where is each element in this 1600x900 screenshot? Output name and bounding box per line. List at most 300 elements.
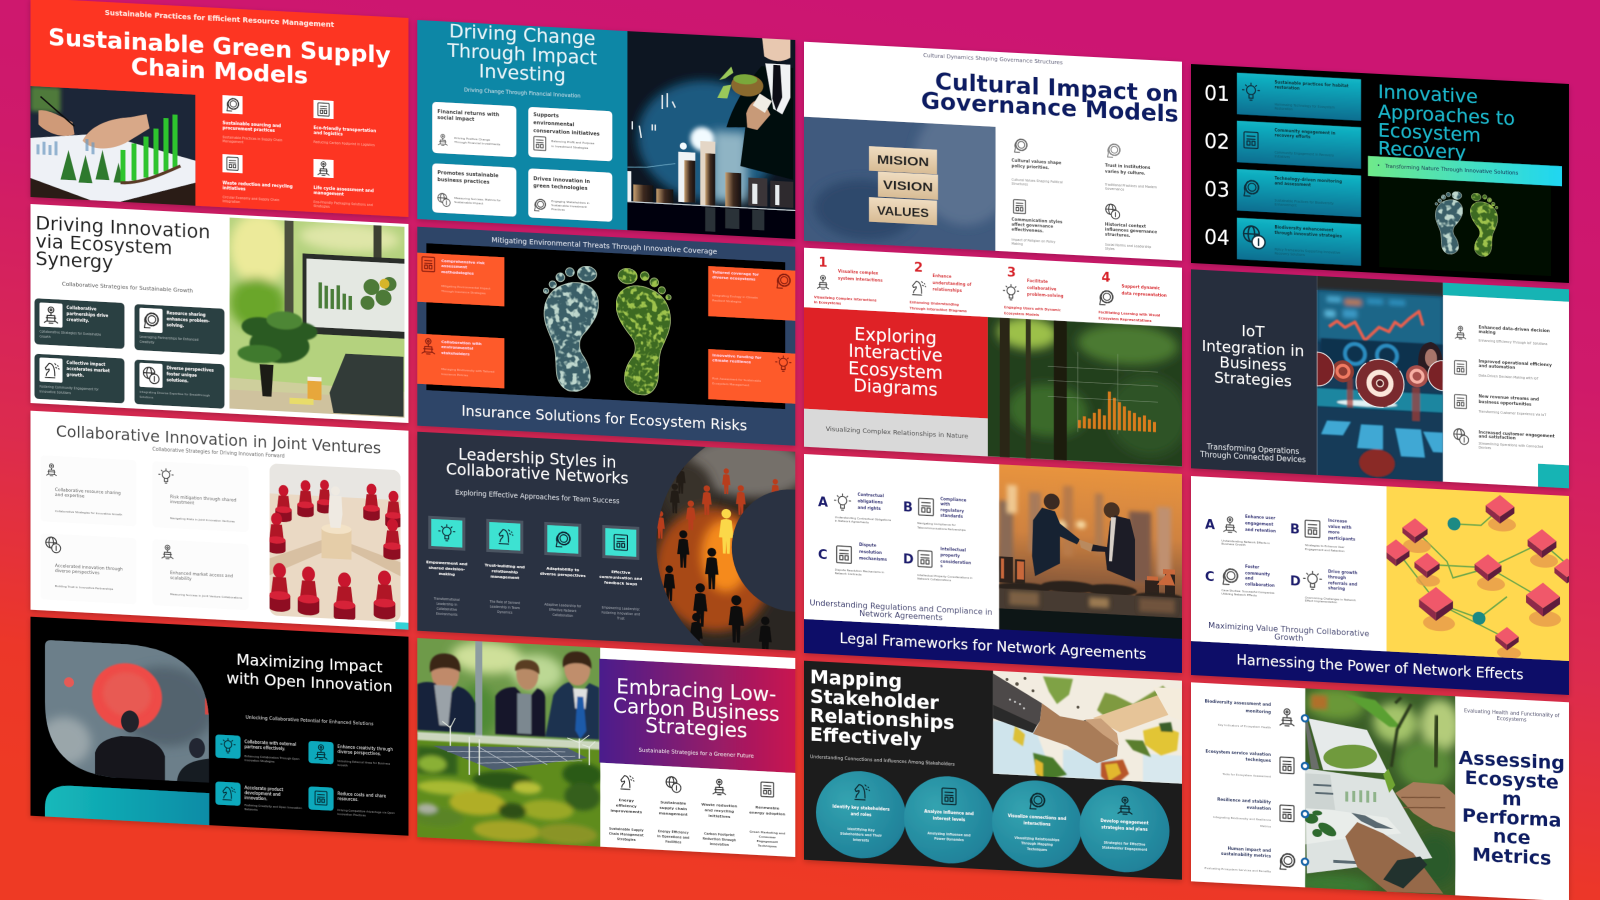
card: collective impact: accelerates market: [66, 366, 110, 373]
title: Embracing Low-: [616, 674, 776, 706]
item: accelerated innovation: [40, 533, 136, 604]
step 01: Sustainable practices for habitat: [1274, 79, 1349, 88]
step 2: understanding of: [932, 280, 972, 287]
subtitle: Exploring Effective Approaches for Team Success: [455, 489, 620, 505]
step 1: Visualize complex: [838, 269, 879, 276]
item: resilience: Integrating Biodiversity and Resilience: [1213, 815, 1271, 822]
step: adaptability: Effective Network: [549, 608, 577, 613]
step 04: [1204, 216, 1361, 266]
item: supply chain: supply chain: [659, 805, 687, 811]
card: financial returns: [432, 102, 516, 157]
title: Stakeholder: [810, 686, 939, 714]
slide: Legal Frameworks for Network Agreements: [804, 454, 1183, 673]
item: customer engagement: Increased customer engagement: [1479, 430, 1555, 439]
illustration: network of red cubes on yellow: [1386, 486, 1569, 661]
step: trust building: The Role of Servant: [489, 599, 521, 605]
title: nce: [1493, 825, 1531, 849]
photo: handshake over city: [998, 464, 1182, 639]
card: environmental conservation: Balancing Profit and Purpose: [551, 139, 595, 145]
circle: visualize: Through Mapping: [1021, 841, 1054, 847]
item: values shape policy: policy priorities.: [1012, 163, 1050, 170]
step: communication: Fostering Innovation and: [602, 610, 640, 616]
step 02: 02: [1204, 129, 1230, 154]
slide: Insurance Solutions for Ecosystem Risks: [417, 227, 795, 446]
card: financial returns: Through Financial Investments: [453, 140, 501, 146]
item B: more: [1328, 529, 1340, 535]
step 03: Enhancement: [1274, 202, 1297, 208]
step: communication: feedback loops: [604, 580, 638, 586]
photo: crowd ring with glowing figure: [656, 447, 796, 651]
card: green technologies: Drives innovation in: [533, 176, 590, 185]
box: risk assessment: [417, 253, 504, 306]
item: accelerated innovation: Building Trust in Innovative Partnerships: [55, 584, 114, 591]
item A: and retention: [1245, 527, 1276, 533]
item: accelerate: Networks: [244, 807, 258, 812]
photo: handshake over world map: [992, 670, 1182, 784]
card: collaborative partnerships: Growth: [40, 334, 51, 339]
item: resource sharing: and expertise: [55, 492, 85, 500]
item: communication styles: Impact of Religion on Policy: [1012, 238, 1056, 244]
item: renewable energy: [749, 781, 786, 849]
step 04: Policy Frameworks Supporting Innovative: [1274, 247, 1340, 255]
item: risk mitigation: investment: [170, 499, 195, 506]
subtitle: Evaluating Health and Functionality of: [1464, 708, 1560, 719]
circle: visualize: Visualizing Relationships: [1015, 836, 1060, 842]
title: Innovative: [1378, 81, 1478, 108]
item D: Effect Implementation: [1305, 599, 1337, 604]
step 01: Harnessing Technology for Ecosystem: [1274, 102, 1335, 110]
item: supply chain: Facilities: [665, 840, 681, 844]
card: green technologies: Practices: [551, 207, 565, 212]
box: collaboration: environmental: [441, 344, 473, 351]
card: environmental conservation: in Investment Strategies: [551, 144, 589, 150]
item: historical context: [1105, 204, 1157, 253]
item: human impact: Evaluating Ecosystem Services and Benefits: [1205, 866, 1271, 874]
title: Mapping: [810, 666, 902, 693]
step: trust building: Leadership in Team: [490, 605, 520, 610]
feature: life cycle: [314, 159, 374, 211]
caption: Understanding Regulations and Compliance in: [810, 598, 992, 617]
circle: identify: [816, 769, 906, 861]
item C: C: [818, 548, 828, 563]
photo: red pawns around white figure: [269, 464, 401, 622]
item: supply chain: Sustainable: [660, 799, 687, 806]
item: accelerate: innovation.: [244, 795, 267, 801]
item: trust in institutions: Traditional Practices and Modern: [1104, 183, 1157, 189]
title: Metrics: [1472, 844, 1551, 870]
feature: sourcing: Management: [222, 139, 244, 144]
step 3: Ecosystem Models: [1004, 311, 1039, 317]
item B: B: [1290, 522, 1300, 538]
item: market access: Enhanced market access and: [170, 570, 233, 579]
item C: collaboration: [1245, 581, 1275, 588]
item: customer engagement: Devices: [1479, 446, 1491, 450]
item D: D: [903, 552, 914, 568]
item: values shape policy: Cultural Values Shaping Political: [1012, 178, 1063, 184]
item: creativity: Enhance creativity through: [338, 744, 393, 752]
step 2: relationships: [932, 287, 963, 293]
card: collaborative partnerships: Collaborative Strategies for Sustainable: [40, 329, 101, 337]
item: operational efficiency: Data-Driven Decision Making with IoT: [1479, 374, 1539, 381]
item C: [818, 540, 888, 578]
box: innovative funding: [708, 349, 795, 404]
subtitle: Through Connected Devices: [1199, 450, 1306, 464]
step 04: Recovery Solutions: [1274, 251, 1305, 257]
title: Driving Innovation: [36, 212, 210, 244]
feature: waste: Integration: [222, 199, 240, 204]
card: collective impact: Innovative Solutions: [40, 389, 71, 395]
step 2: Enhancing Understanding: [909, 300, 959, 307]
step: empowerment: shared decision-: [429, 565, 465, 572]
teal panel: [45, 784, 209, 825]
title: Synergy: [36, 248, 113, 274]
item C: Dispute: [859, 542, 877, 548]
title: Ecosystem: [848, 359, 943, 384]
title: Chain Models: [131, 52, 308, 90]
card: resource sharing: solving.: [166, 322, 185, 328]
item: market access: [152, 539, 248, 610]
card: financial returns: Financial returns with: [437, 109, 500, 118]
slide: Driving Change Through Impact Investing: [417, 19, 795, 239]
subtitle: Collaborative Strategies for Driving Innovation Forward: [152, 447, 285, 460]
circle: analyze: [904, 774, 994, 866]
step 03: [1204, 167, 1361, 217]
card: collaborative partnerships: [34, 298, 124, 349]
circle: analyze: Analyzing Influence and: [927, 831, 971, 838]
item: reduce costs: resources.: [338, 796, 359, 802]
caption: Growth: [1274, 632, 1303, 643]
title: Interactive: [848, 342, 943, 367]
photo: mission vision values blocks: VISION: [883, 178, 933, 195]
card: environmental conservation: environmental: [533, 120, 575, 128]
feature: sourcing: Sustainable sourcing and: [222, 120, 281, 128]
item B: regulatory: [940, 507, 964, 513]
item: trust in institutions: Governance: [1105, 187, 1124, 192]
slide: Sustainable Green Supply Chain Models: [30, 0, 408, 217]
item: human impact: Human impact and: [1228, 846, 1271, 853]
subtitle: Mitigating Environmental Threats Through Innovative Coverage: [491, 235, 717, 256]
title: Cultural Impact on: [935, 68, 1178, 108]
black panel with footprints: [426, 243, 785, 409]
item: resilience: Resilience and stability: [1217, 797, 1271, 805]
item D: Network Collaborations: [917, 576, 952, 582]
box: risk assessment: Comprehensive risk: [441, 258, 485, 265]
item: biodiversity assessment: monitoring: [1246, 708, 1271, 715]
item C: mechanisms: [859, 555, 888, 562]
item A: [818, 490, 891, 526]
item B: [1290, 516, 1356, 554]
circle: visualize: interactions: [1023, 820, 1051, 827]
footer title: Insurance Solutions for Ecosystem Risks: [461, 404, 747, 435]
caption: Network Agreements: [859, 609, 943, 622]
item: energy efficiency: Strategies: [617, 837, 636, 842]
photo: businessman with glowing city: [627, 31, 796, 239]
item C: C: [1205, 570, 1215, 585]
step 1: Visualizing Complex Interactions: [814, 295, 877, 303]
slide: Driving Innovation via Ecosystem Synergy: [30, 201, 408, 423]
item: decision making: [1455, 323, 1550, 346]
item: service valuation: Ecosystem service valuation: [1205, 749, 1271, 757]
feature: sourcing: procurement practices: [222, 125, 275, 133]
box: collaboration: [417, 334, 504, 388]
card: diverse perspectives: Solutions: [140, 395, 154, 400]
item C: Foster: [1245, 564, 1259, 570]
item: revenue streams: business opportunities: [1479, 399, 1532, 407]
item: accelerated innovation: diverse perspectives: [55, 568, 100, 576]
box: collaboration: Managing Biodiversity with Tailored: [441, 367, 495, 374]
step 02: [1204, 119, 1361, 169]
title: Relationships: [810, 705, 954, 734]
item: historical context: Historical context: [1105, 222, 1146, 229]
subtitle: Ecosystems: [1497, 716, 1527, 724]
item A: A: [1205, 518, 1215, 533]
circle: analyze: Analyze influence and: [924, 809, 974, 816]
item: waste reduction: Carbon Footprint: [704, 832, 735, 837]
item A: Understanding Network Effects in: [1222, 539, 1270, 545]
step 3: Facilitate: [1027, 278, 1048, 284]
item C: resolution: [859, 549, 882, 555]
slide: Innovative Approaches to Ecosystem Recovery: [1191, 64, 1569, 283]
item: creativity: Unlocking External Ideas for Business: [338, 759, 391, 766]
box: collaboration: Insurance Policies: [441, 372, 468, 377]
step 4: [1098, 270, 1167, 324]
card: collective impact: growth.: [66, 372, 85, 378]
feature: life cycle: management: [314, 190, 344, 197]
item B: Telecommunications Partnerships: [916, 525, 966, 532]
item: communication styles: Making: [1012, 242, 1023, 246]
step 04: Biodiversity enhancement: [1274, 224, 1334, 233]
item: risk mitigation: Navigating Risks in Joint Innovation Ventures: [170, 516, 235, 524]
step 3: [1003, 265, 1064, 318]
item: biodiversity assessment: Biodiversity assessment and: [1205, 699, 1271, 707]
card: resource sharing: Resource sharing: [166, 310, 206, 317]
card: green technologies: [528, 168, 612, 222]
item: service valuation: techniques: [1246, 757, 1272, 763]
item: resource sharing: Collaborative Strategies for Innovative Growth: [55, 509, 122, 517]
slide: Leadership Styles in Collaborative Networks: [417, 420, 807, 658]
card: collective impact: Fostering Community Engagement for: [40, 384, 99, 392]
title: Governance Models: [921, 87, 1178, 128]
step: trust building: management: [490, 574, 519, 580]
item: communication styles: Communication styles: [1012, 217, 1063, 224]
feature: sourcing: [222, 95, 282, 146]
item D: property: [940, 552, 960, 558]
item: supply chain: in Operations and: [657, 834, 690, 840]
item: resource sharing: Collaborative resource sharing: [55, 487, 121, 496]
item: revenue streams: Transforming Customer Experience via IoT: [1478, 409, 1546, 417]
item: revenue streams: [1455, 392, 1546, 417]
box: risk assessment: methodologies: [441, 269, 474, 276]
step: communication: Trust: [616, 616, 625, 621]
item: accelerate: Fostering Creativity and Open Innovation: [244, 803, 302, 810]
item: renewable energy: Engagement: [757, 839, 778, 844]
item A: [1205, 512, 1276, 548]
item: values shape policy: Structures: [1012, 182, 1028, 187]
item: resilience: [1213, 796, 1294, 830]
subtitle: Sustainable Practices for Efficient Resource Management: [105, 8, 335, 29]
item A: obligations: [858, 498, 883, 505]
item D: s: [940, 563, 943, 568]
item A: engagement: [1245, 520, 1273, 527]
caption strip: Visualizing Complex Relationships in Nature: [826, 425, 968, 440]
card: sustainable business: Measuring Success: Metrics for: [454, 196, 502, 202]
teal corner square: [1538, 464, 1569, 488]
item A: and rights: [858, 505, 881, 511]
subtitle: Sustainable Strategies for a Greener Future: [639, 748, 754, 760]
title: via Ecosystem: [35, 230, 172, 260]
title: Ecosystem: [1378, 119, 1481, 147]
item B: participants: [1328, 535, 1356, 542]
step: trust building: Dynamics: [497, 610, 513, 615]
step 02: Community engagement in: [1274, 127, 1336, 136]
item: historical context: Social Norms and Leadership: [1105, 243, 1151, 249]
photo: businessmen around model solar farm: [417, 638, 601, 847]
card: resource sharing: Creativity: [140, 340, 155, 345]
card: collective impact: [34, 354, 124, 403]
item: biodiversity assessment: [1205, 699, 1294, 731]
subtitle: Driving Change Through Financial Innovation: [464, 87, 581, 100]
slide: Cultural Impact on Governance Models: [804, 42, 1182, 261]
item B: value with: [1328, 524, 1352, 530]
circle: identify: Stakeholders and Their: [840, 832, 882, 838]
step 1: in Ecosystems: [814, 300, 841, 306]
item: trust in institutions: varies by culture.: [1105, 169, 1146, 176]
step: empowerment: making: [439, 571, 455, 577]
item C: community: [1245, 570, 1270, 577]
item: energy efficiency: Chain Management: [609, 832, 644, 837]
item C: and: [1245, 575, 1254, 581]
item: waste reduction: Reduction through: [702, 837, 737, 842]
item D: [1290, 567, 1358, 605]
feature: waste: Circular Economy and Supply Chain: [222, 195, 279, 202]
step 01: 01: [1204, 81, 1230, 106]
item: human impact: [1205, 845, 1294, 875]
item A: Contractual: [858, 492, 885, 498]
step 02: Community Engagement in Recovery: [1274, 150, 1334, 158]
box: collaboration: Collaboration with: [441, 339, 482, 346]
feature: transport: Eco-friendly transportation: [314, 125, 376, 133]
item: supply chain: Energy Efficiency: [658, 829, 690, 835]
item: biodiversity assessment: Key Indicators of Ecosystem Health: [1218, 723, 1271, 730]
title: with Open Innovation: [226, 669, 393, 696]
box: collaboration: stakeholders: [441, 350, 470, 357]
title: Performa: [1462, 805, 1561, 832]
step 4: Facilitating Learning with Visual: [1098, 310, 1160, 318]
step 4: 4: [1101, 270, 1111, 286]
box: tailored coverage: Resilient Strategies: [712, 298, 742, 304]
card: green technologies: green technologies: [533, 183, 588, 192]
step: trust building: relationship: [492, 568, 518, 575]
circle: develop: Stakeholder Engagement: [1102, 845, 1148, 852]
card: sustainable business: [432, 163, 516, 217]
title: Strategies: [1214, 369, 1292, 391]
circle: visualize: Techniques: [1027, 847, 1047, 852]
item: decision making: Enhancing Efficiency Through IoT Solutions: [1479, 339, 1548, 346]
tagline bar: [1368, 156, 1562, 186]
circle: visualize: [992, 778, 1082, 870]
step 2: [910, 260, 972, 314]
step 01: [1204, 71, 1361, 121]
feature: waste: initiatives: [222, 185, 246, 191]
footprints image: [1379, 177, 1551, 276]
item: resource sharing: [40, 455, 136, 526]
circle: identify: Interests: [853, 838, 869, 843]
item D: Overcoming Challenges in Network: [1305, 596, 1356, 602]
item C: Network Contracts: [835, 571, 862, 577]
item: energy efficiency: efficiency: [616, 803, 637, 809]
item: energy efficiency: Sustainable Supply: [609, 827, 644, 833]
box: tailored coverage: [708, 266, 795, 321]
subtitle: Transforming Operations: [1206, 442, 1299, 456]
item: communication styles: [1012, 199, 1063, 248]
item A: Understanding Contractual Obligations: [835, 515, 891, 522]
photo: mission vision values blocks: VALUES: [877, 204, 929, 220]
card: diverse perspectives: Integrating Diverse Expertise for Breakthrough: [140, 390, 210, 397]
feature: sourcing: Sustainable Practices in Supply Chain: [222, 135, 282, 142]
step 03: Sustainable Practices for Biodiversity: [1274, 198, 1334, 206]
caption strip: [804, 409, 988, 456]
step: empowerment: [426, 516, 468, 617]
slide: Collaborative Innovation in Joint Ventures: [30, 411, 408, 630]
card: environmental conservation: [528, 107, 612, 161]
feature: waste: [222, 154, 293, 207]
item D: referrals and: [1328, 580, 1357, 587]
item: energy efficiency: Energy: [619, 797, 634, 803]
item: collaborate: Enhancing Collaboration Through Open: [244, 754, 300, 761]
step: trust building: [485, 519, 525, 615]
item: accelerated innovation: Accelerated innovation through: [55, 563, 123, 573]
card: sustainable business: Sustainable Impact: [454, 200, 484, 206]
item C: [1205, 562, 1275, 598]
feature: life cycle: Life cycle assessment and: [314, 185, 374, 193]
item A: Enhance user: [1245, 514, 1275, 520]
slide: Harnessing the Power of Network Effects: [1191, 476, 1580, 696]
item B: standards: [940, 513, 964, 519]
title: Carbon Business: [613, 693, 780, 726]
card: diverse perspectives: solutions.: [166, 377, 189, 383]
item: waste reduction: and recycling: [705, 807, 734, 814]
item: risk mitigation: Risk mitigation through shared: [170, 494, 237, 504]
box: tailored coverage: Integrating Ecology in Climate: [712, 293, 758, 300]
item: collaborate: Collaborate with external: [244, 739, 296, 747]
item: trust in institutions: Trust in institutions: [1105, 163, 1151, 170]
item: operational efficiency: and automation: [1479, 363, 1515, 370]
card: environmental conservation: conservation initiatives: [533, 128, 600, 138]
item: market access: scalability: [170, 575, 192, 582]
item B: Increase: [1328, 518, 1347, 524]
subtitle: Collaborative Strategies for Sustainable Growth: [62, 282, 194, 295]
title: Maximizing Impact: [236, 651, 383, 676]
box: innovative funding: Risk Assessment for Sustainable: [712, 376, 761, 383]
box: risk assessment: assessment: [441, 263, 467, 269]
step: communication: [599, 525, 643, 622]
item: decision making: Enhanced data-driven decision: [1479, 325, 1550, 333]
item B: Compliance: [940, 496, 967, 503]
feature: transport: and logistics: [314, 130, 343, 137]
circle: develop: strategies and plans: [1101, 824, 1148, 832]
circle: visualize: Visualize connections and: [1008, 813, 1066, 821]
subtitle: Unlocking Collaborative Potential for Enhanced Solutions: [246, 715, 374, 727]
step 2: Enhance: [932, 273, 952, 279]
item C: Case Studies: Successful Companies: [1222, 588, 1275, 595]
title: Recovery: [1378, 137, 1466, 164]
navy footer: Harnessing the Power of Network Effects: [1236, 652, 1524, 684]
step: communication: communication and: [599, 574, 643, 581]
step 2: 2: [914, 261, 923, 276]
step 03: and assessment: [1274, 180, 1311, 187]
item: historical context: influences governance: [1105, 227, 1157, 234]
step: empowerment: Environments: [436, 612, 458, 617]
